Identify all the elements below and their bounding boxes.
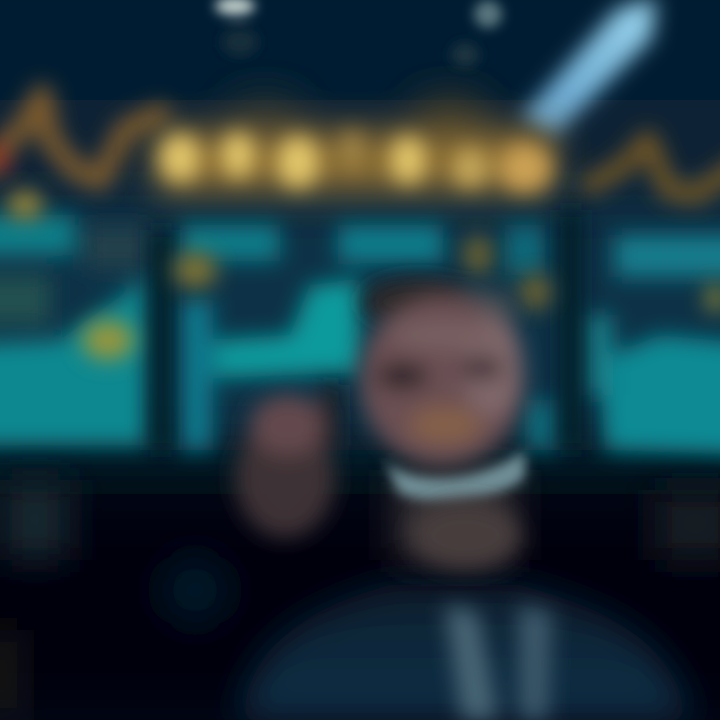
raised hand xyxy=(235,385,340,538)
hair xyxy=(362,278,516,328)
lower corner monitors xyxy=(0,480,720,720)
right wavy gold chart line xyxy=(590,140,720,195)
ceiling lights xyxy=(215,0,502,67)
gold ticker characters xyxy=(160,130,551,192)
left wavy gold chart line xyxy=(0,95,160,180)
gold screen accents xyxy=(7,191,720,360)
lower hand xyxy=(410,501,520,569)
light streak xyxy=(520,0,656,138)
shirt and tie xyxy=(445,605,552,720)
suit jacket xyxy=(159,554,690,720)
central ticker glow xyxy=(155,93,555,192)
teal screen panels xyxy=(0,215,720,455)
dark vertical dividers xyxy=(150,210,582,450)
neck xyxy=(395,470,515,560)
collar xyxy=(385,450,525,501)
face xyxy=(360,294,524,466)
trader figure xyxy=(159,278,690,720)
